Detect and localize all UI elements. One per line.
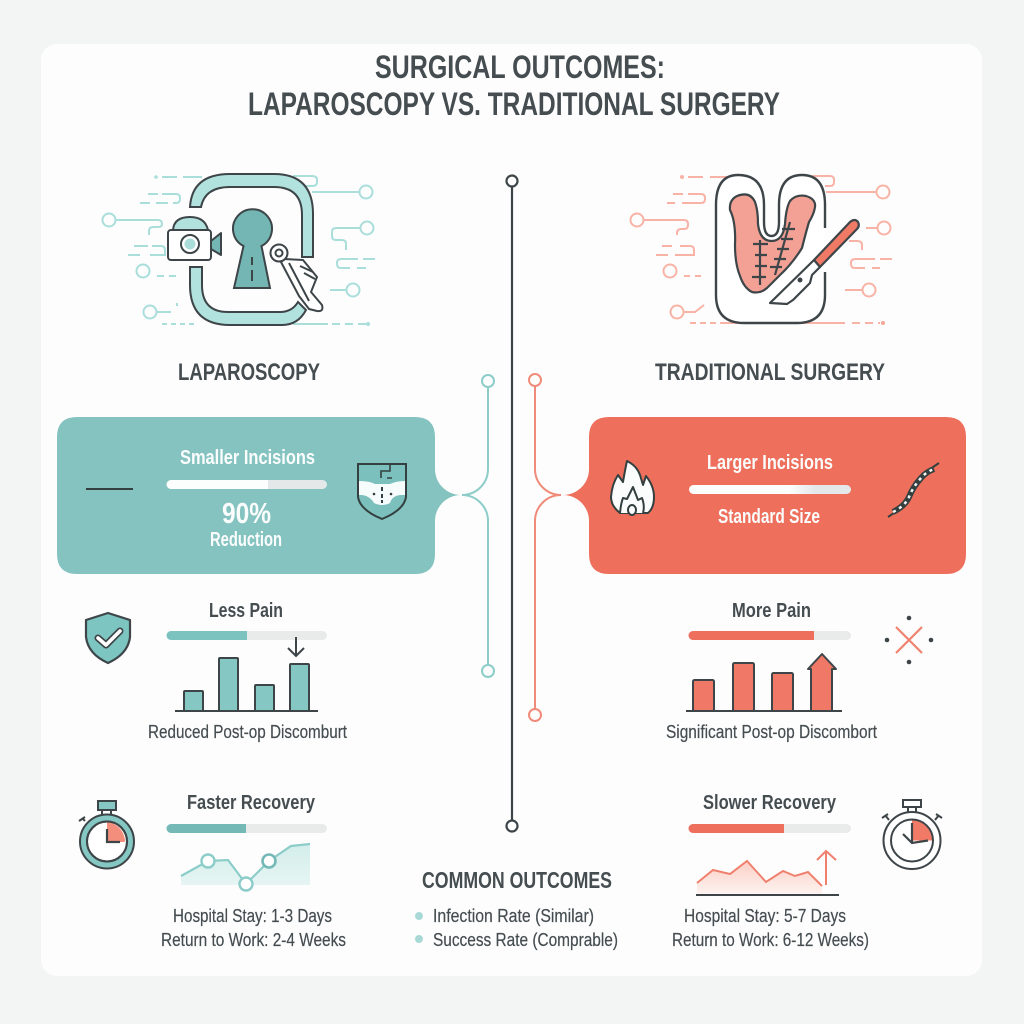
panel: smaller incisions: Reduction (210, 529, 282, 551)
center divider line (506, 176, 518, 832)
faster recovery block: Return to Work: 2-4 Weeks (161, 930, 346, 950)
pink tissue with stitches (730, 194, 815, 292)
camera (168, 217, 221, 260)
common outcomes: Success Rate (Comprable) (433, 930, 618, 950)
faster recovery block: Faster Recovery (187, 792, 316, 814)
scalpel (770, 220, 859, 304)
surgical tool (270, 244, 322, 311)
less pain block (148, 600, 347, 742)
common outcomes (415, 867, 618, 950)
icon: stopwatch outline (882, 800, 942, 869)
panel: smaller incisions: Smaller Incisions (180, 447, 315, 469)
heading: laparoscopy: LAPAROSCOPY (178, 359, 320, 386)
heading: traditional surgery: TRADITIONAL SURGERY (655, 359, 885, 386)
title (248, 49, 780, 122)
panel: larger incisions (563, 417, 966, 574)
title: SURGICAL OUTCOMES: (375, 49, 665, 85)
icon: laparoscopy keyhole illustration (102, 174, 375, 326)
panel: larger incisions: Standard Size (718, 506, 820, 528)
faster recovery block (161, 792, 346, 950)
more pain block: Significant Post-op Discombort (666, 722, 877, 742)
bar chart: more pain (686, 654, 842, 711)
slower recovery block: Hospital Stay: 5-7 Days (684, 906, 846, 926)
less pain block: Less Pain (209, 600, 283, 622)
common outcomes: Infection Rate (Similar) (433, 906, 594, 926)
connector: laparoscopy side (462, 375, 494, 677)
less pain block: Reduced Post-op Discomburt (148, 722, 347, 742)
keyhole (233, 209, 272, 288)
icon: traditional surgery tissue illustration (630, 175, 892, 325)
icon: suture line (888, 463, 939, 517)
icon: x mark (885, 616, 933, 664)
panel: smaller incisions (57, 417, 461, 574)
panel: larger incisions: Larger Incisions (707, 452, 833, 474)
more pain block: More Pain (732, 600, 811, 622)
panel: smaller incisions: 90% (222, 498, 271, 530)
keyhole frame ring (190, 174, 313, 325)
icon: shield check (86, 613, 130, 663)
faster recovery block: Hospital Stay: 1-3 Days (173, 906, 332, 926)
slower recovery block: Return to Work: 6-12 Weeks) (672, 930, 869, 950)
bar chart: less pain (175, 637, 318, 711)
more pain block (666, 600, 877, 742)
line chart: recovery red (696, 851, 839, 895)
title: LAPAROSCOPY VS. TRADITIONAL SURGERY (248, 86, 780, 122)
icon: flame (611, 461, 654, 515)
connector: traditional side (529, 374, 561, 721)
slower recovery block (672, 792, 869, 950)
icon: stopwatch teal (79, 801, 134, 868)
tray outline (716, 175, 825, 323)
line chart: recovery teal (181, 844, 310, 890)
slower recovery block: Slower Recovery (703, 792, 837, 814)
icon: incision shield (358, 464, 406, 519)
common outcomes: COMMON OUTCOMES (422, 867, 612, 893)
